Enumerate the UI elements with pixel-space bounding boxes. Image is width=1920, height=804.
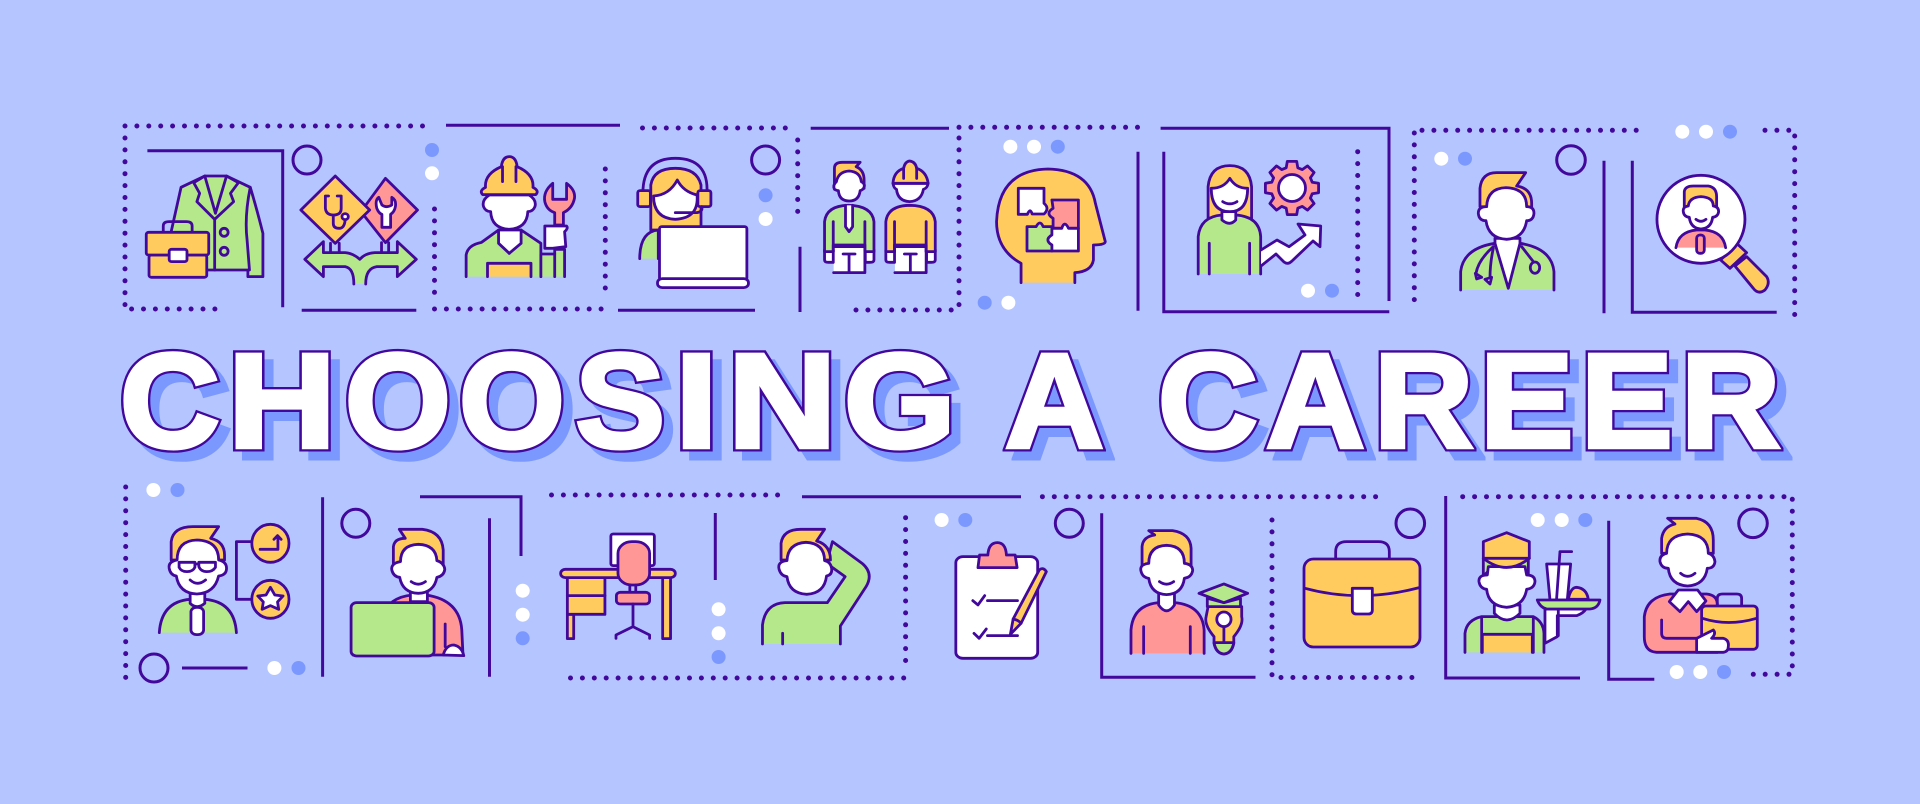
title: R xyxy=(1383,336,1483,485)
title: R xyxy=(1374,327,1474,476)
title: S xyxy=(576,327,665,476)
title: A xyxy=(1266,327,1365,476)
title: S xyxy=(576,327,665,476)
title: E xyxy=(1480,327,1574,476)
icon: man with glasses and career options xyxy=(159,524,289,635)
title: R xyxy=(1690,336,1790,485)
title: C xyxy=(1158,327,1257,476)
icon: waiter with tray xyxy=(1465,533,1600,652)
title: I xyxy=(684,336,727,485)
icon: clipboard checklist with pencil xyxy=(956,543,1046,658)
icon: doctor with stethoscope xyxy=(1461,173,1554,290)
icon: graduate with idea bulb xyxy=(1131,531,1248,654)
title: R xyxy=(1681,327,1781,476)
title: O xyxy=(345,327,451,476)
icon: briefcase xyxy=(1304,542,1420,647)
icon: support agent with headset and laptop xyxy=(638,158,748,288)
title: N xyxy=(728,327,836,476)
title: H xyxy=(228,327,336,476)
icon: jacket and briefcase xyxy=(146,176,263,277)
title: A xyxy=(1275,336,1374,485)
title: O xyxy=(459,327,565,476)
title: N xyxy=(736,336,845,485)
title: O xyxy=(468,336,574,485)
title: C xyxy=(1167,336,1266,485)
title: O xyxy=(354,336,460,485)
icon: head with jigsaw puzzle xyxy=(997,169,1105,283)
icon: man scratching head xyxy=(762,529,869,644)
icon: man carrying a case xyxy=(1644,518,1757,652)
title: E xyxy=(1489,336,1583,485)
title: E xyxy=(1581,327,1673,476)
title: A xyxy=(1014,336,1112,485)
title: R xyxy=(1374,327,1474,476)
icon: desk with chair xyxy=(561,534,675,639)
title: H xyxy=(228,327,336,476)
icon: career crossroads signs xyxy=(301,176,418,284)
icon: magnifying glass over candidate xyxy=(1657,175,1768,292)
icon: man working at laptop xyxy=(351,529,464,656)
icon: office worker and construction worker xyxy=(825,161,935,273)
title: I xyxy=(675,327,718,476)
title: I xyxy=(675,327,718,476)
title: C xyxy=(129,336,229,485)
title: C xyxy=(120,327,220,476)
title: A xyxy=(1266,327,1365,476)
title: H xyxy=(237,336,345,485)
title: A xyxy=(1005,327,1103,476)
title: C xyxy=(120,327,220,476)
title: E xyxy=(1581,327,1673,476)
title: A xyxy=(1005,327,1103,476)
title: O xyxy=(459,327,565,476)
title: C xyxy=(1158,327,1257,476)
icon: woman with gear and growth arrow xyxy=(1198,161,1321,274)
icon: construction worker with wrench xyxy=(466,157,575,277)
title: G xyxy=(844,327,955,476)
title: S xyxy=(584,336,674,485)
title: E xyxy=(1590,336,1682,485)
title: R xyxy=(1681,327,1781,476)
title: E xyxy=(1480,327,1574,476)
title: G xyxy=(844,327,955,476)
title: N xyxy=(728,327,836,476)
title: G xyxy=(853,336,964,485)
title: O xyxy=(345,327,451,476)
